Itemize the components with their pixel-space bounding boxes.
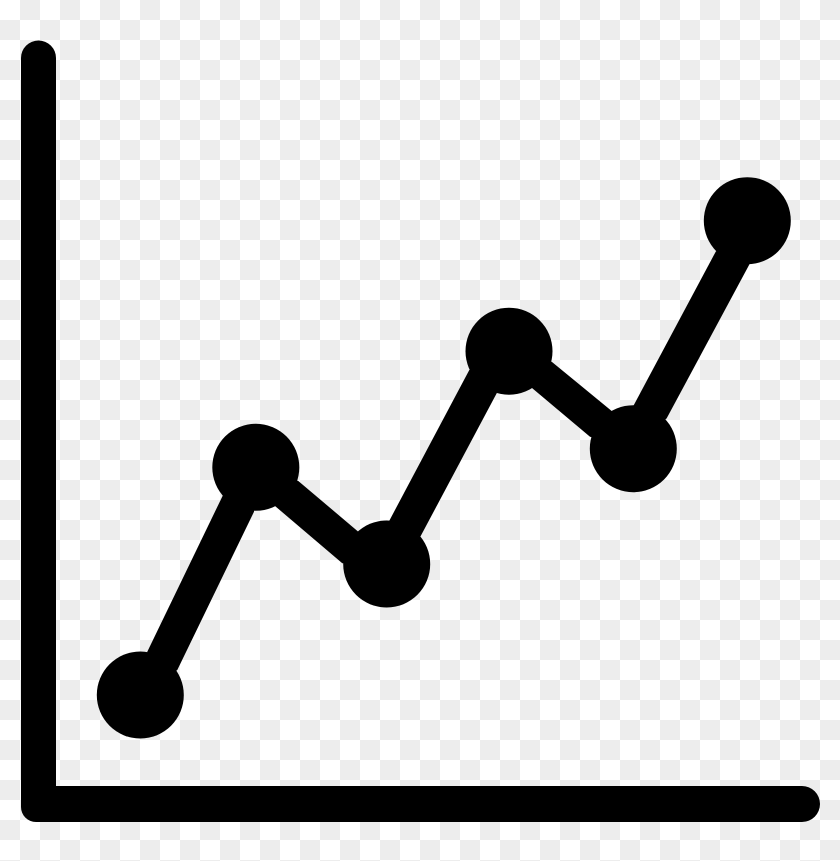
data line [140, 221, 750, 695]
data points [97, 177, 791, 738]
